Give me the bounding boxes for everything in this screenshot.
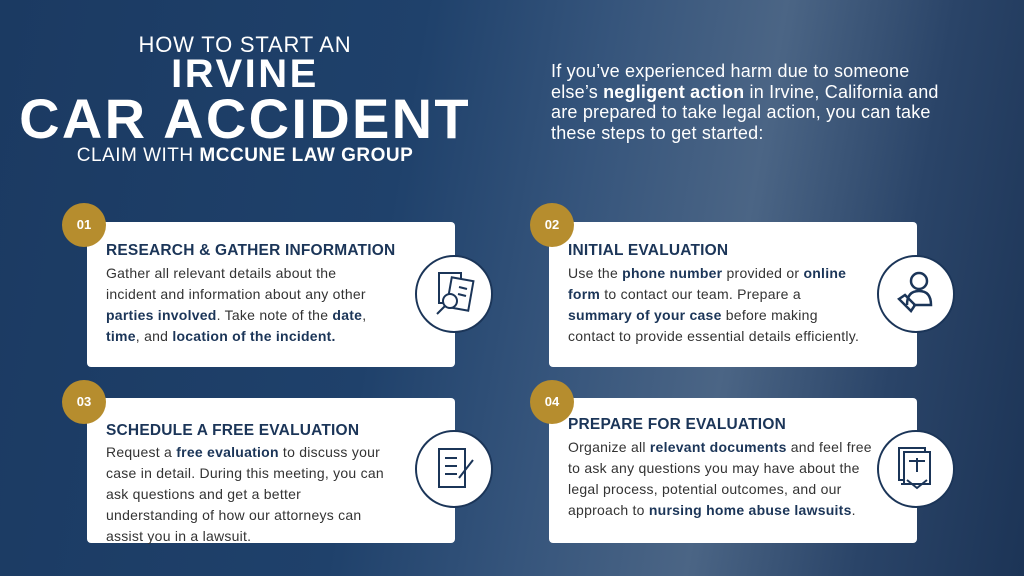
card 1: incident and information about any other (106, 286, 366, 302)
card 2 (549, 222, 917, 367)
card 4: PREPARE FOR EVALUATION (568, 416, 786, 433)
card 2: contact to provide essential details efficiently. (568, 328, 859, 344)
card 2: summary of your case before making (568, 307, 818, 323)
card 4: legal process, potential outcomes, and our (568, 481, 842, 497)
card 3: assist you in a lawsuit. (106, 528, 251, 544)
card 4: Organize all relevant documents and feel free (568, 439, 872, 455)
card 1: RESEARCH & GATHER INFORMATION (106, 242, 395, 259)
intro text: If you’ve experienced harm due to someone else’s negligent action in Irvine, California and are prepared to take legal action, you can take these steps to get started: (551, 61, 939, 142)
title (19, 32, 471, 166)
card 1: parties involved. Take note of the date, (106, 307, 366, 323)
card 3: understanding of how our attorneys can (106, 507, 361, 523)
card 1 (87, 222, 455, 367)
card 1: Gather all relevant details about the (106, 265, 336, 281)
badge 01: 01 (77, 217, 91, 232)
card 3: SCHEDULE A FREE EVALUATION (106, 422, 359, 439)
card 3: Request a free evaluation to discuss your (106, 444, 380, 460)
title: HOW TO START AN (139, 32, 351, 57)
card 2: INITIAL EVALUATION (568, 242, 728, 259)
icon: documents magnifier (415, 255, 493, 333)
title: CAR ACCIDENT (19, 87, 471, 150)
badge 03: 03 (77, 394, 91, 409)
card 3: case in detail. During this meeting, you can (106, 465, 384, 481)
card 4: approach to nursing home abuse lawsuits. (568, 502, 856, 518)
card 3 (87, 398, 455, 543)
badge 01 (62, 203, 106, 247)
card 1: time, and location of the incident. (106, 328, 336, 344)
card 4 (549, 398, 917, 543)
badge 02 (530, 203, 574, 247)
icon: legal handshake (877, 430, 955, 508)
card 2: Use the phone number provided or online (568, 265, 846, 281)
card 2: form to contact our team. Prepare a (568, 286, 801, 302)
badge 02: 02 (545, 217, 559, 232)
badge 04: 04 (545, 394, 559, 409)
badge 03 (62, 380, 106, 424)
card 3: ask questions and get a better (106, 486, 301, 502)
title: IRVINE (171, 52, 319, 96)
badge 04 (530, 380, 574, 424)
card 4: to ask any questions you may have about the (568, 460, 860, 476)
title: CLAIM WITH MCCUNE LAW GROUP (77, 145, 413, 166)
icon: contact person (877, 255, 955, 333)
icon: checklist (415, 430, 493, 508)
